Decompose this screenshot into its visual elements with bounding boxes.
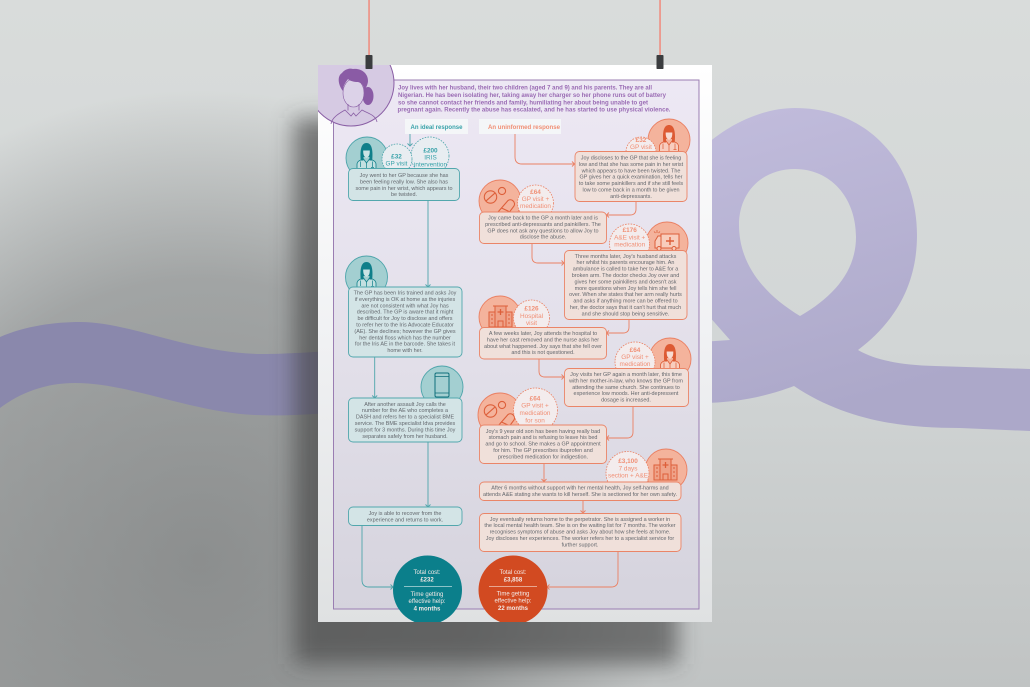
icon: ambulance <box>646 222 688 264</box>
cost: £126 hospital visit: Hospital <box>520 313 543 320</box>
cost: £32 GP visit: GP visit <box>386 160 408 168</box>
ideal step 4: recovery: experience and returns to work. <box>367 517 444 523</box>
cost: £200 IRIS intervention: intervention <box>414 161 447 168</box>
text box <box>480 212 606 244</box>
arrow: uninformed step 4 to 5 <box>539 359 564 380</box>
intro text: Joy lives with her husband, their two children (aged 7 and 9) and his parents. They are all <box>398 85 652 92</box>
cost: £3,100 7 days section + A&E: £3,100 <box>618 458 638 465</box>
text box: After 6 months without support with her mental health, Joy self-harms and <box>491 486 669 492</box>
uninformed step 1: GP visit <box>575 119 690 202</box>
text box <box>564 368 688 406</box>
text box: GP gives her a quick examination, tells her <box>580 175 683 181</box>
text box: prescribed medication for indigestion. <box>498 454 589 460</box>
cost: £32 GP visit <box>626 137 656 167</box>
uninformed step 8: returns to perpetrator <box>480 514 681 552</box>
icon: doctor <box>346 256 388 298</box>
cost: £64 GP visit + medication: £64 <box>630 347 641 354</box>
text box: dosage is increased. <box>601 398 651 404</box>
uninformed step 8: returns to perpetrator: Joy eventually returns home to the perpetrator. She is assigned a worker in <box>490 517 670 523</box>
total: uninformed response: effective help: <box>495 599 532 605</box>
ideal step 2: Iris trained GP <box>346 256 462 357</box>
text box: support for 3 months. During this time Joy <box>355 427 456 433</box>
arrow: ideal step 2 to 3 <box>372 357 377 398</box>
text box: with her mother-in-law, who knows the GP from <box>568 378 683 384</box>
text box: GP does not ask any questions to allow Joy to <box>487 228 599 234</box>
text box: Joy came back to the GP a month later and is <box>488 216 598 222</box>
text box: more questions when Joy tells him she fell <box>575 286 676 292</box>
text box: her, the doctor says that it can't hurt that much <box>570 305 681 311</box>
heading: An uninformed response <box>479 119 561 134</box>
text box: attending the same church. She continues to <box>572 385 680 391</box>
cost: £3,100 7 days section + A&E: 7 days <box>619 465 637 472</box>
text box: Three months later, Joy's husband attacks <box>575 254 677 260</box>
text box: be difficult for Joy to disclose and offers <box>357 316 453 322</box>
text box: Joy discloses to the GP that she is feeling <box>581 156 681 162</box>
text box: over. When she states that her arm really hurts <box>569 292 682 298</box>
poster inner frame <box>334 80 699 609</box>
text box: for the Iris AE in the barcode. She takes it <box>355 342 456 348</box>
total: uninformed response: £3,858 <box>504 577 523 583</box>
cost: £3,100 7 days section + A&E <box>606 452 649 494</box>
poster <box>318 65 712 622</box>
cost: £126 hospital visit: visit <box>526 320 537 327</box>
cost: £3,100 7 days section + A&E: section + A&E <box>608 473 648 480</box>
text box: ambulance is called to take her to A&E for a <box>573 267 679 273</box>
icon: hospital <box>645 449 687 491</box>
ribbon: left wave <box>0 322 330 415</box>
icon: phone <box>421 366 463 408</box>
text box: home with her. <box>387 348 423 354</box>
cost: £176 A&E visit + medication: £176 <box>623 227 637 234</box>
text box: which appears to have been twisted. The <box>581 168 680 174</box>
arrow: uninformed step 8 to total <box>547 552 618 590</box>
text box: Joy's 9 year old son has been having really bad <box>486 429 600 435</box>
arrow: ideal step 3 to 4 <box>426 442 430 507</box>
text box: her dental floss which has the number <box>359 335 451 341</box>
cost: £32 GP visit: £32 <box>636 137 647 144</box>
text box: are not consistent with what Joy has <box>361 303 449 309</box>
text box <box>348 168 460 200</box>
cost: £200 IRIS intervention <box>411 137 449 175</box>
arrow: uninformed step 2 to 3 <box>532 244 564 266</box>
ideal step 4: recovery: Joy is able to recover from the <box>369 511 441 517</box>
cost: £64 GP visit + medication <box>518 185 554 221</box>
text box: disclose the abuse. <box>520 235 567 241</box>
cost: £64 GP visit + medication for son: for son <box>525 417 545 424</box>
icon: left clip <box>366 55 372 69</box>
arrow: uninformed step 1 to 2 <box>606 202 636 218</box>
text box: if everything is OK at home as the injuries <box>355 297 455 303</box>
text box <box>348 287 462 357</box>
text box: for him. The GP prescribes ibuprofen and <box>493 448 593 454</box>
text box: Joy went to her GP because she has <box>360 173 449 179</box>
text box: service. The BME specialist Idva provides <box>355 421 456 427</box>
text box <box>564 250 687 320</box>
arrow: to uninformed step 1 <box>515 134 574 166</box>
text box: some pain in her wrist, which appears to <box>355 186 453 192</box>
text box <box>480 425 606 464</box>
text box: her whilst his parents encourage him. An <box>577 260 674 266</box>
text box: The GP has been Iris trained and asks Joy <box>354 290 457 296</box>
cost: £64 GP visit + medication for son: medication <box>520 410 551 417</box>
text box <box>575 152 687 202</box>
cost: £64 GP visit + medication <box>615 342 655 382</box>
icon: right clip <box>656 55 664 69</box>
text box: and asks if anything more can be offered to <box>573 299 678 305</box>
cost: £176 A&E visit + medication: A&E visit + <box>614 234 646 241</box>
text box: separates safely from her husband. <box>362 434 448 440</box>
arrow: ideal step 4 to total <box>362 526 393 590</box>
arrow: uninformed step 7 to 8 <box>580 500 586 513</box>
text box: to take some painkillers and if she still feels <box>579 181 683 187</box>
total: uninformed response: 22 months <box>498 606 529 612</box>
icon: pills <box>478 393 522 437</box>
ideal step 3: specialist BME service <box>348 366 463 442</box>
text box: to refer her to the Iris Advocate Educator <box>356 322 454 328</box>
text box: broken arm. The doctor checks Joy over and <box>572 273 679 279</box>
icon: doctor <box>649 338 691 380</box>
total: uninformed response <box>478 556 548 624</box>
cost: £32 GP visit: £32 <box>391 153 402 160</box>
text box: and this is not questioned. <box>511 350 575 356</box>
text box: A few weeks later, Joy attends the hospital to <box>489 331 597 337</box>
intro text <box>398 85 671 114</box>
uninformed step 7: section and A&E <box>480 449 687 500</box>
uninformed step 2: GP visit and medication <box>479 180 606 244</box>
text box: described. The GP is aware that it might <box>357 310 454 316</box>
cost: £126 hospital visit: £126 <box>524 306 539 313</box>
cost: £200 IRIS intervention: £200 <box>423 147 438 154</box>
text box: been feeling really low. She also has <box>360 179 448 185</box>
cost: £200 IRIS intervention: IRIS <box>424 154 437 161</box>
poster shadow <box>294 118 678 664</box>
profile avatar: Joy <box>318 65 394 126</box>
cost: £176 A&E visit + medication: medication <box>614 242 646 249</box>
text box: experience low moods. Her anti-depressent <box>574 391 679 397</box>
text box: stomach pain and is refusing to leave his bed <box>489 435 597 441</box>
total: uninformed response: Time getting <box>497 592 529 598</box>
text box: low and that she has some pain in her wrist <box>579 162 684 168</box>
uninformed step 8: returns to perpetrator: further support. <box>562 542 599 548</box>
intro text: Nigerian. He has been isolating her, taking away her charger so her phone runs out of battery <box>398 92 667 99</box>
text box: (AE). She declines; however the GP gives <box>354 329 456 335</box>
ideal step 1: GP visit and IRIS intervention <box>346 137 460 200</box>
total: ideal response: effective help: <box>409 599 446 605</box>
total: uninformed response: Total cost: <box>499 570 527 576</box>
text box: and go to school. She makes a GP appointment <box>485 442 601 448</box>
ribbon: right loop <box>700 108 1030 431</box>
arrow: uninformed step 6 to 7 <box>542 464 546 482</box>
arrow: uninformed step 5 to 6 <box>606 406 633 440</box>
uninformed step 5: GP visit with mother-in-law <box>564 338 691 406</box>
cost: £64 GP visit + medication for son: GP visit + <box>521 403 549 410</box>
cost: £32 GP visit <box>382 144 412 174</box>
text box: and she should stop being sensitive. <box>582 311 670 317</box>
uninformed step 8: returns to perpetrator: recognises symptoms of abuse and asks Joy about how she feels at home. <box>490 530 671 536</box>
cost: £64 GP visit + medication: £64 <box>530 189 541 196</box>
total: ideal response <box>393 556 462 624</box>
icon: doctor <box>648 119 690 161</box>
intro text: so she cannot contact her friends and family, humiliating her about being unable to get <box>398 99 648 106</box>
text box: attends A&E stating she wants to kill herself. She is sectioned for her own safety. <box>483 492 677 498</box>
uninformed step 4: hospital visit <box>479 296 606 359</box>
heading: An ideal response <box>405 119 468 134</box>
icon: doctor <box>346 137 388 179</box>
cost: £64 GP visit + medication for son: £64 <box>530 395 541 402</box>
text box: be twisted. <box>391 192 417 198</box>
text box: After another assault Joy calls the <box>364 402 446 408</box>
text box: low to come back in a month to be given <box>582 188 680 194</box>
text box: gives her some painkillers and doesn't ask <box>574 279 677 285</box>
uninformed step 8: returns to perpetrator: the local mental health team. She is on the waiting list for 7 months. The worker <box>484 523 676 529</box>
text box: Joy visits her GP again a month later, this time <box>570 372 682 378</box>
cost: £32 GP visit: GP visit <box>630 144 652 151</box>
text box: about what happened. Joy says that she fell over <box>484 344 602 350</box>
heading: An ideal response: An ideal response <box>410 124 463 131</box>
icon: pills <box>479 180 521 222</box>
hanging cords <box>368 0 661 56</box>
cost: £64 GP visit + medication for son <box>514 388 558 432</box>
text box: DASH and refers her to a specialist BME <box>356 415 454 421</box>
intro text: pregnant again. Recently the abuse has escalated, and he has started to use physical violence. <box>398 106 671 114</box>
uninformed step 3: A&E visit and medication <box>564 222 688 320</box>
arrow: ideal step 1 to 2 <box>426 200 430 287</box>
cost: £64 GP visit + medication: GP visit + <box>522 196 549 203</box>
cost: £126 hospital visit <box>514 300 550 336</box>
cost: £64 GP visit + medication: medication <box>520 203 551 210</box>
text box: have her cast removed and the nurse asks her <box>487 337 599 343</box>
text box <box>480 328 606 359</box>
text box: number for the AE who completes a <box>362 408 449 414</box>
icon: hospital <box>479 296 521 338</box>
text box <box>480 482 681 500</box>
uninformed step 8: returns to perpetrator: Joy discloses her experiences. The worker refers her to a specialist service for <box>486 536 674 542</box>
heading: An uninformed response: An uninformed response <box>488 124 560 131</box>
cost: £64 GP visit + medication: medication <box>620 361 651 368</box>
total: ideal response: Total cost: <box>413 570 441 576</box>
text box: prescribed anti-depressants and painkillers. The <box>485 222 601 228</box>
ideal step 4: recovery <box>348 507 462 526</box>
total: ideal response: Time getting <box>411 592 443 598</box>
total: ideal response: £232 <box>420 577 434 583</box>
uninformed step 6: GP visit for son <box>478 388 606 464</box>
text box: anti-depressants. <box>610 194 652 200</box>
cost: £176 A&E visit + medication <box>610 224 650 264</box>
total: ideal response: 4 months <box>414 606 441 612</box>
arrow: ideal heading to step 1 <box>408 134 412 146</box>
cost: £64 GP visit + medication: GP visit + <box>621 354 649 361</box>
text box <box>348 398 462 442</box>
arrow: uninformed step 3 to 4 <box>606 320 629 336</box>
